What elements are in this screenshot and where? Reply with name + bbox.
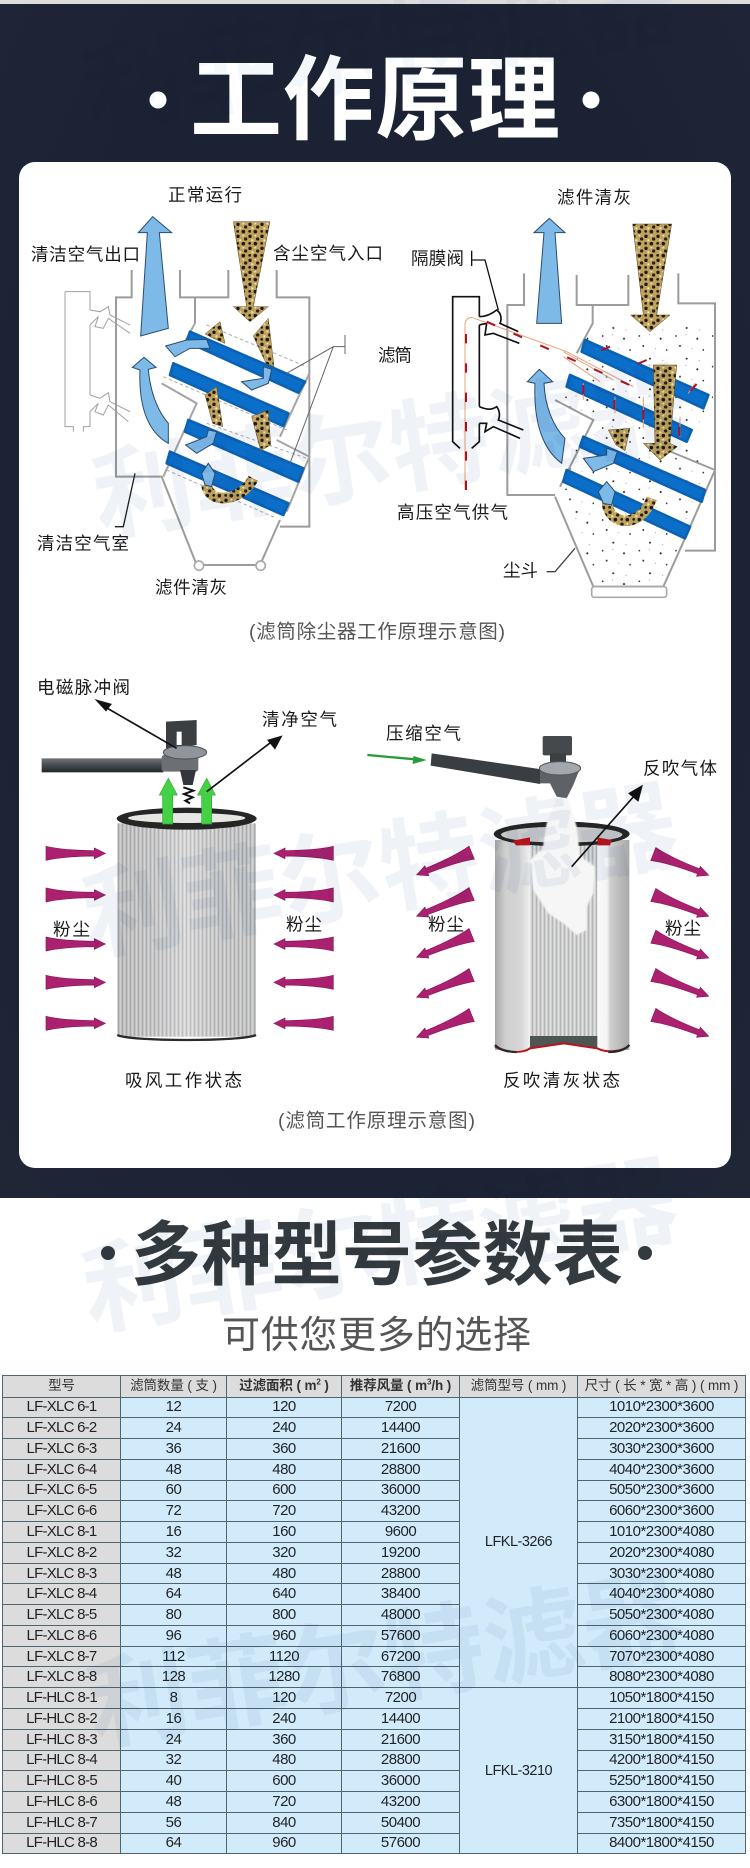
clean air arrows — [527, 218, 617, 505]
table rows: LF-XLC models: 120 — [272, 1398, 296, 1415]
table rows: LF-XLC models: 7200 — [385, 1398, 416, 1415]
table rows: LF-HLC models: LF-HLC 8-6 — [26, 1793, 97, 1810]
table rows: LF-XLC models: 4040*2300*4080 — [609, 1585, 714, 1602]
table header row — [3, 1376, 745, 1397]
label group: second diagram labels: 粉尘 — [665, 918, 701, 938]
table rows: LF-XLC models: 600 — [272, 1481, 296, 1498]
table rows: LF-HLC models: 32 — [166, 1751, 181, 1768]
table rows: LF-HLC models: LF-HLC 8-8 — [26, 1834, 97, 1851]
table rows: LF-XLC models: 43200 — [381, 1502, 420, 1519]
table rows: LF-XLC models: 360 — [272, 1440, 296, 1457]
label group: first diagram labels: 清洁空气出口 — [31, 244, 140, 264]
caption: dust collector diagram: (滤筒除尘器工作原理示意图) — [249, 621, 505, 643]
table rows: LF-XLC models: 800 — [272, 1606, 296, 1623]
table rows: LF-XLC models: 2020*2300*3600 — [609, 1419, 714, 1436]
table rows: LF-XLC models: 96 — [166, 1627, 181, 1644]
table rows: LF-HLC models: 120 — [272, 1689, 296, 1706]
watermarks: 利菲尔特滤器 — [75, 770, 685, 974]
green compressed air arrow — [367, 755, 415, 759]
table rows: LF-HLC models: 7200 — [385, 1689, 416, 1706]
table header row: 滤筒数量 ( 支 ) — [130, 1378, 217, 1393]
table rows: LF-HLC models: 6300*1800*4150 — [609, 1793, 714, 1810]
filter tubes — [167, 332, 305, 515]
table rows: LF-XLC models: 16 — [166, 1523, 181, 1540]
label group: second diagram labels: 清净空气 — [262, 710, 337, 730]
dust arrows — [46, 846, 333, 1030]
label group: second diagram labels: 电磁脉冲阀 — [37, 678, 130, 698]
label group: second diagram labels: 粉尘 — [286, 914, 322, 934]
label group: first diagram labels: 清洁空气室 — [37, 534, 129, 554]
table rows: LF-XLC models: 32 — [166, 1544, 181, 1561]
table rows: LF-HLC models: 8 — [170, 1689, 177, 1706]
reverse-blow gas plume — [530, 798, 595, 935]
table rows: LF-XLC models: 5050*2300*3600 — [609, 1481, 714, 1498]
clean air arrows — [132, 217, 272, 487]
table rows: LF-XLC models: 3030*2300*4080 — [609, 1564, 714, 1582]
callout arrows — [95, 699, 282, 792]
valve and pipe — [431, 736, 581, 798]
table rows: LF-HLC models: 960 — [272, 1834, 296, 1851]
label group: first diagram labels: 滤件清灰 — [557, 188, 631, 208]
table rows: LF-HLC models: LF-HLC 8-5 — [26, 1772, 97, 1789]
table rows: LF-HLC models: 8400*1800*4150 — [609, 1834, 714, 1851]
diagram: reverse-blow cleaning state — [367, 736, 711, 1052]
table rows: LF-HLC models: LF-HLC 8-4 — [26, 1751, 97, 1768]
table rows: LF-XLC models: 48 — [166, 1564, 181, 1582]
label group: second diagram labels: 反吹气体 — [643, 758, 718, 778]
table rows: LF-XLC models: 128 — [162, 1668, 185, 1685]
table rows: LF-XLC models: 480 — [272, 1461, 296, 1478]
open filter cartridge — [494, 822, 630, 1052]
dust-laden air arrows — [608, 224, 677, 460]
table rows: LF-XLC models: 14400 — [381, 1419, 420, 1436]
table rows: LF-HLC models: 14400 — [381, 1710, 420, 1727]
table rows: LF-HLC models: 360 — [272, 1731, 296, 1748]
table rows: LF-XLC models: 57600 — [381, 1627, 420, 1644]
table rows: LF-XLC models: LF-XLC 8-4 — [26, 1585, 97, 1602]
label group: second diagram labels: 反吹清灰状态 — [503, 1070, 620, 1090]
table rows: LF-HLC models: LF-HLC 8-7 — [26, 1814, 97, 1831]
table rows: LF-XLC models: 320 — [272, 1544, 296, 1561]
table rows: LF-XLC models: LF-XLC 6-6 — [26, 1502, 97, 1519]
table rows: LF-XLC models: 38400 — [381, 1585, 420, 1602]
table rows: LF-HLC models: 4200*1800*4150 — [609, 1751, 714, 1768]
table rows: LF-HLC models: LF-HLC 8-3 — [26, 1731, 97, 1748]
table rows: LF-XLC models: 36000 — [381, 1481, 420, 1498]
table rows: LF-XLC models: 3030*2300*3600 — [609, 1440, 714, 1457]
label group: second diagram labels: 吸风工作状态 — [125, 1070, 242, 1090]
table rows: LF-XLC models: 72 — [166, 1502, 181, 1519]
dust-laden air arrows — [205, 222, 274, 451]
label group: second diagram labels: 压缩空气 — [386, 724, 461, 744]
table rows: LF-XLC models: LF-XLC 6-4 — [26, 1461, 97, 1478]
diagram: filter cleaning — [453, 218, 715, 597]
table rows: LF-XLC models: 6060*2300*4080 — [609, 1627, 714, 1644]
callout arrow — [572, 785, 643, 867]
table rows: LF-HLC models: LF-HLC 8-2 — [26, 1710, 97, 1727]
table rows: LF-XLC models: 67200 — [381, 1648, 420, 1665]
table rows: LF-XLC models: LF-XLC 8-3 — [26, 1564, 97, 1582]
table rows: LF-XLC models: 21600 — [381, 1440, 420, 1457]
valve and pipe — [42, 720, 207, 803]
table header row: 推荐风量 ( m3/h ) — [350, 1378, 451, 1393]
table rows: LF-XLC models: 19200 — [381, 1544, 420, 1561]
table header row: 型号 — [48, 1378, 75, 1393]
table rows: LF-XLC models: LFKL-3266 — [485, 1534, 552, 1550]
table rows: LF-HLC models: 21600 — [381, 1731, 420, 1748]
table rows: LF-HLC models: 40 — [166, 1772, 181, 1789]
table rows: LF-XLC models: 8080*2300*4080 — [609, 1668, 714, 1685]
table rows: LF-XLC models: 7070*2300*4080 — [609, 1648, 714, 1665]
table rows: LF-HLC models: 5250*1800*4150 — [609, 1772, 714, 1789]
table rows: LF-XLC models: 240 — [272, 1419, 296, 1436]
table rows: LF-XLC models: 160 — [272, 1523, 296, 1540]
table rows: LF-HLC models: LFKL-3210 — [485, 1763, 552, 1779]
table rows: LF-HLC models: 1050*1800*4150 — [609, 1689, 714, 1706]
caption: cartridge diagram: (滤筒工作原理示意图) — [278, 1110, 475, 1132]
label group: first diagram labels — [31, 185, 631, 598]
table rows: LF-XLC models: 6060*2300*3600 — [609, 1502, 714, 1519]
table rows: LF-HLC models: 840 — [272, 1814, 296, 1831]
table header row: 滤筒型号 ( mm ) — [471, 1378, 566, 1393]
table rows: LF-XLC models: LF-XLC 8-7 — [26, 1648, 97, 1665]
table rows: LF-HLC models: 720 — [272, 1793, 296, 1810]
diagram: normal operation — [65, 217, 345, 570]
label group: second diagram labels — [37, 678, 718, 1090]
table header row: 过滤面积 ( m2 ) — [239, 1378, 329, 1393]
table rows: LF-XLC models: LF-XLC 6-3 — [26, 1440, 97, 1457]
table rows: LF-XLC models — [3, 1398, 745, 1687]
table rows: LF-XLC models: 1010*2300*4080 — [609, 1523, 714, 1540]
heading: 多种型号参数表: 多种型号参数表 — [131, 1216, 623, 1294]
table rows: LF-XLC models: LF-XLC 6-5 — [26, 1481, 97, 1498]
table rows: LF-HLC models: 36000 — [381, 1772, 420, 1789]
table rows: LF-HLC models: 50400 — [381, 1814, 420, 1831]
table rows: LF-XLC models: 12 — [166, 1398, 181, 1415]
label group: second diagram labels: 粉尘 — [53, 920, 90, 940]
table rows: LF-XLC models: LF-XLC 6-2 — [26, 1419, 97, 1436]
watermarks: 利菲尔特滤器 — [80, 1560, 690, 1764]
table rows: LF-XLC models: 640 — [272, 1585, 296, 1602]
table rows: LF-XLC models: LF-XLC 6-1 — [26, 1398, 97, 1415]
table rows: LF-HLC models: 48 — [166, 1793, 181, 1810]
table rows: LF-XLC models: LF-XLC 8-5 — [26, 1606, 97, 1623]
table rows: LF-XLC models: LF-XLC 8-1 — [26, 1523, 97, 1540]
table rows: LF-HLC models — [3, 1688, 745, 1853]
table rows: LF-XLC models: LF-XLC 8-6 — [26, 1627, 97, 1644]
table rows: LF-XLC models: 1280 — [268, 1668, 300, 1685]
table rows: LF-XLC models: 2020*2300*4080 — [609, 1544, 714, 1561]
clean air arrows — [159, 778, 215, 824]
table rows: LF-XLC models: 76800 — [381, 1668, 420, 1685]
table rows: LF-XLC models: 48 — [166, 1461, 181, 1478]
table rows: LF-HLC models: 56 — [166, 1814, 181, 1831]
table rows: LF-HLC models: 24 — [166, 1731, 181, 1748]
table rows: LF-XLC models: 48000 — [381, 1606, 420, 1623]
table rows: LF-XLC models: 64 — [166, 1585, 181, 1602]
table rows: LF-XLC models: 60 — [166, 1481, 181, 1498]
table rows: LF-HLC models: 2100*1800*4150 — [609, 1710, 714, 1727]
watermarks: 利菲尔特滤器 — [75, 1145, 685, 1349]
table rows: LF-XLC models: 5050*2300*4080 — [609, 1606, 714, 1623]
filter tubes — [563, 340, 708, 538]
table rows: LF-XLC models: 9600 — [385, 1523, 416, 1540]
label group: first diagram labels: 正常运行 — [168, 185, 242, 205]
parameter table — [2, 1375, 746, 1854]
table rows: LF-XLC models: 720 — [272, 1502, 296, 1519]
diagram: suction working state — [42, 699, 333, 1040]
table rows: LF-XLC models: 24 — [166, 1419, 181, 1436]
label group: first diagram labels: 滤筒 — [378, 346, 412, 366]
compressed air jets — [465, 317, 695, 490]
table rows: LF-HLC models: 7350*1800*4150 — [609, 1814, 714, 1831]
table rows: LF-HLC models: 28800 — [381, 1751, 420, 1768]
label group: second diagram labels: 粉尘 — [428, 914, 464, 934]
table rows: LF-XLC models: 36 — [166, 1440, 181, 1457]
table rows: LF-XLC models: 28800 — [381, 1564, 420, 1582]
label group: first diagram labels: 高压空气供气 — [397, 502, 508, 522]
subheading: 可供您更多的选择 — [222, 1315, 531, 1357]
table rows: LF-XLC models: 4040*2300*3600 — [609, 1461, 714, 1478]
table rows: LF-HLC models: 64 — [166, 1834, 181, 1851]
table rows: LF-XLC models: 112 — [162, 1648, 185, 1665]
table rows: LF-HLC models: 600 — [272, 1772, 296, 1789]
table rows: LF-XLC models: LF-XLC 8-2 — [26, 1544, 97, 1561]
table header row: 尺寸 ( 长 * 宽 * 高 ) ( mm ) — [585, 1378, 738, 1393]
label group: first diagram labels: 含尘空气入口 — [273, 244, 383, 264]
label group: first diagram labels: 尘斗 — [503, 560, 538, 580]
filter cartridge — [117, 808, 257, 1040]
table rows: LF-XLC models: 1120 — [269, 1648, 299, 1665]
table rows: LF-XLC models: 1010*2300*3600 — [609, 1398, 714, 1415]
table rows: LF-HLC models: LF-HLC 8-1 — [26, 1689, 97, 1706]
table rows: LF-HLC models: 57600 — [381, 1834, 420, 1851]
watermarks: 利菲尔特滤器 — [85, 351, 695, 555]
title: 工作原理: 工作原理 — [190, 50, 560, 152]
table rows: LF-XLC models: 28800 — [381, 1461, 420, 1478]
table rows: LF-HLC models: 480 — [272, 1751, 296, 1768]
dust arrows — [414, 846, 711, 1044]
table rows: LF-XLC models: 480 — [272, 1564, 296, 1582]
blowpipe — [453, 297, 523, 448]
table rows: LF-HLC models: 43200 — [381, 1793, 420, 1810]
table rows: LF-HLC models: 16 — [166, 1710, 181, 1727]
label group: first diagram labels: 滤件清灰 — [155, 578, 227, 598]
table rows: LF-XLC models: 80 — [166, 1606, 181, 1623]
table rows: LF-HLC models: 3150*1800*4150 — [609, 1731, 714, 1748]
table rows: LF-XLC models: 960 — [272, 1627, 296, 1644]
table rows: LF-HLC models: 240 — [272, 1710, 296, 1727]
label group: first diagram labels: 隔膜阀 — [411, 248, 464, 268]
table rows: LF-XLC models: LF-XLC 8-8 — [26, 1668, 97, 1685]
